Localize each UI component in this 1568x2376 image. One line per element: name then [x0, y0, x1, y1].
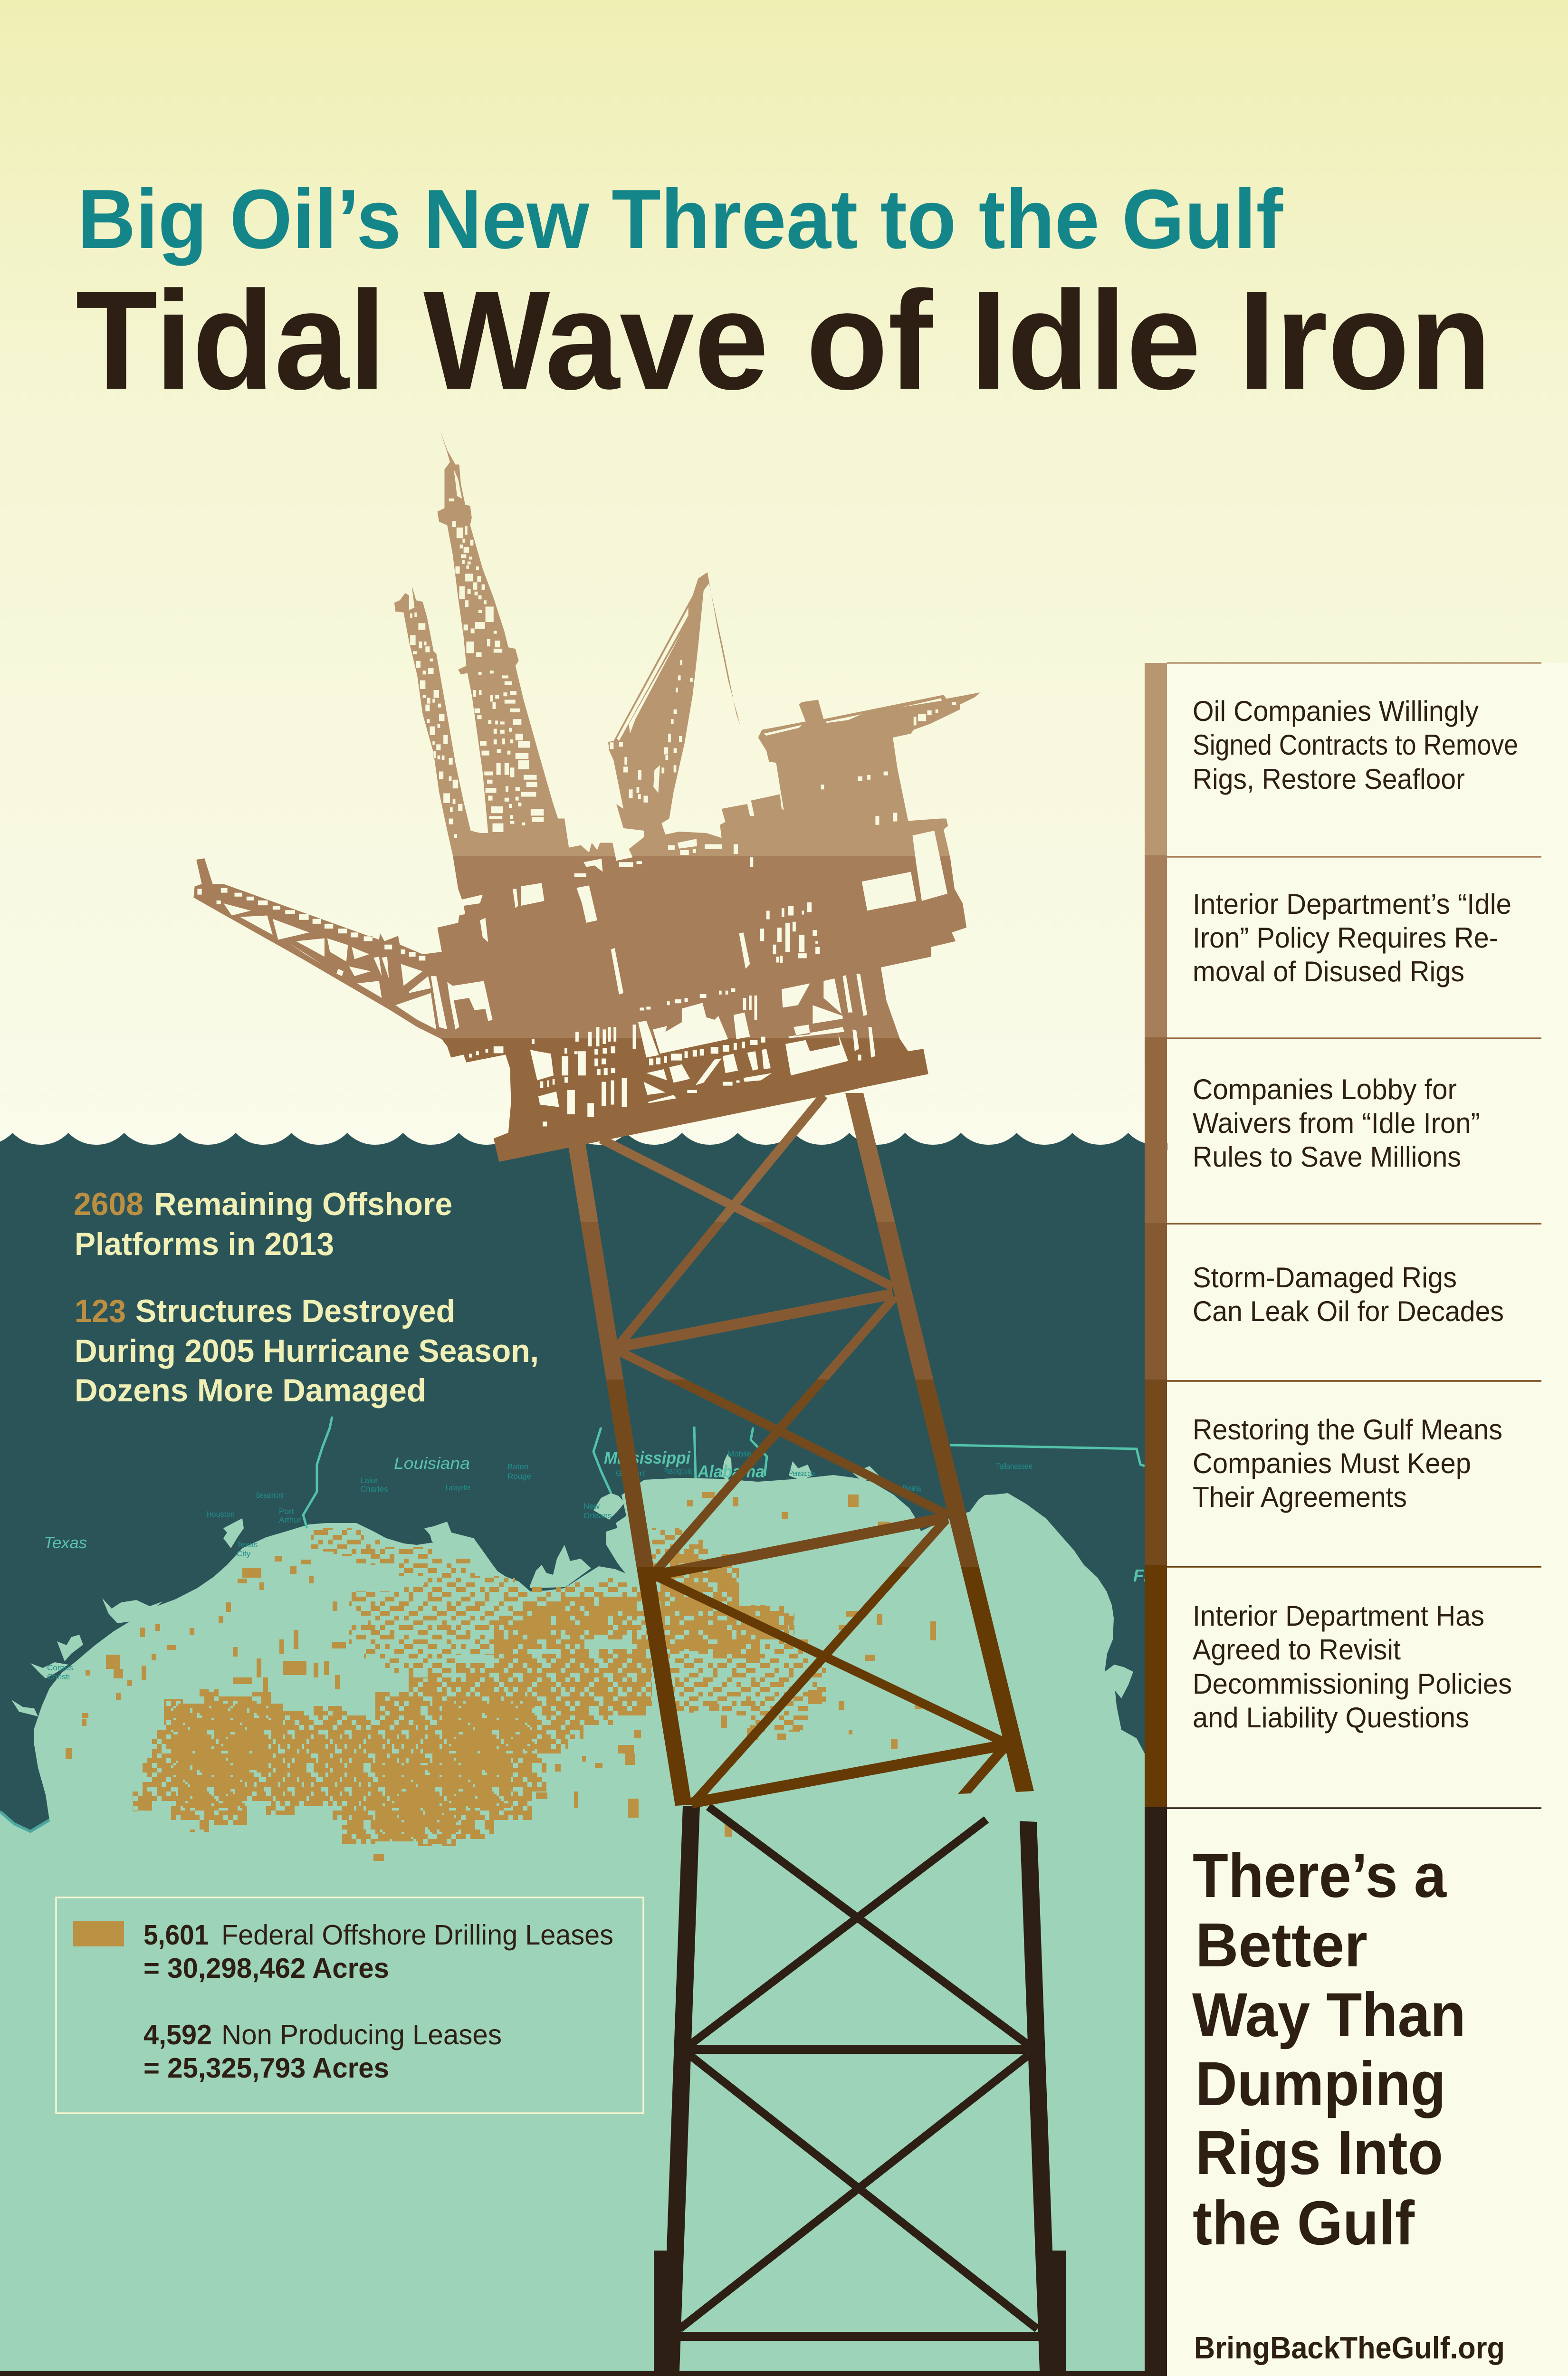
state names: Mississippi — [604, 1448, 691, 1467]
city names: Panama — [903, 1484, 921, 1493]
sidebar: step 5 text: Their Agreements — [1193, 1481, 1407, 1513]
website url: BringBackTheGulf.org — [1194, 2330, 1505, 2365]
stat: remaining platforms: 2608 — [74, 1186, 143, 1222]
city names: Texas — [237, 1540, 258, 1549]
sidebar: step 5 text: Restoring the Gulf Means — [1193, 1414, 1502, 1446]
sidebar: closing statement: Way Than — [1192, 1980, 1466, 2050]
title block — [76, 172, 1492, 419]
map labels — [44, 1448, 1149, 1681]
city names — [47, 1449, 1033, 1681]
stat: destroyed structures: Dozens More Damaged — [75, 1372, 426, 1408]
city names: Corpus — [47, 1663, 73, 1672]
leases: dense western and central field — [133, 1635, 652, 1846]
legend text — [143, 1919, 613, 2084]
sidebar: step 6 text — [1193, 1600, 1512, 1734]
sidebar: closing statement: There’s a — [1193, 1840, 1447, 1910]
map: Gulf of Mexico with coastline — [0, 1417, 1145, 2371]
legend text: = 25,325,793 Acres — [143, 2052, 389, 2084]
sidebar: step 1 text: Oil Companies Willingly — [1193, 695, 1479, 727]
upper jacket: broken brace — [958, 1743, 1010, 1794]
sidebar: cream panel background — [1167, 663, 1568, 2376]
lower jacket: legs and feet — [654, 1806, 1066, 2371]
state names: Louisiana — [394, 1455, 470, 1473]
sidebar: step 6 text: Interior Department Has — [1193, 1600, 1484, 1632]
city names: Arthur — [279, 1515, 301, 1524]
state names: Texas — [44, 1534, 87, 1552]
state names: Fl — [1133, 1566, 1149, 1585]
map: coastline edge — [0, 1811, 49, 1831]
city names: Port — [279, 1507, 294, 1516]
leases: solid western lobes — [171, 1704, 535, 1841]
sidebar: step 3 text — [1193, 1073, 1480, 1173]
city names: Beaumont — [256, 1491, 284, 1500]
sidebar: step 5 text: Companies Must Keep — [1193, 1447, 1471, 1479]
lower jacket: intact structure on the seabed — [654, 1806, 1066, 2371]
city names: Orleans — [583, 1511, 612, 1520]
city names: Christi — [47, 1672, 70, 1681]
legend text: Federal Offshore Drilling Leases — [221, 1919, 613, 1951]
sidebar: step 1 text: Rigs, Restore Seafloor — [1193, 763, 1465, 795]
sidebar: closing statement — [1192, 1840, 1466, 2258]
stat: remaining platforms — [74, 1186, 452, 1262]
city names: Houston — [206, 1510, 235, 1519]
upper jacket: braces — [601, 1095, 1005, 1805]
sidebar: step 5 text — [1193, 1414, 1502, 1513]
seabed strip — [0, 2371, 1145, 2376]
lower jacket: horizontal members — [679, 2045, 1041, 2341]
sidebar: step 3 text: Rules to Save Millions — [1193, 1141, 1461, 1173]
leases: dense eastern core — [653, 1544, 794, 1663]
city names: Mobile — [727, 1449, 751, 1458]
city names: Charles — [360, 1485, 388, 1494]
stat: destroyed structures: During 2005 Hurricane Season, — [75, 1333, 539, 1369]
map: bays, marshes and delta — [11, 1454, 1133, 1716]
sidebar: step 1 text — [1193, 695, 1518, 795]
stat: destroyed structures: Structures Destroyed — [135, 1293, 455, 1329]
sidebar: step 4 text: Storm-Damaged Rigs — [1193, 1262, 1457, 1293]
stat: destroyed structures: 123 — [75, 1293, 126, 1329]
state names: Alabama — [697, 1462, 765, 1481]
city names: Gulfport — [616, 1469, 645, 1478]
city names: Pensacola — [789, 1469, 815, 1478]
city names: Lafayette — [446, 1483, 470, 1492]
stat: remaining platforms: Platforms in 2013 — [75, 1226, 334, 1262]
sidebar: step 6 text: and Liability Questions — [1193, 1702, 1469, 1734]
map: rivers and state borders — [303, 1417, 1145, 1528]
city names: Tallahassee — [996, 1462, 1033, 1471]
sidebar: step 2 text — [1193, 888, 1511, 987]
sidebar: closing statement: Better — [1195, 1910, 1367, 1980]
leases: medium density coastal band — [311, 1528, 826, 1732]
legend text: Non Producing Leases — [221, 2019, 502, 2050]
legend text: = 30,298,462 Acres — [143, 1953, 389, 1984]
sidebar: step 1 text: Signed Contracts to Remove — [1193, 729, 1518, 761]
sidebar: step 6 text: Agreed to Revisit — [1193, 1634, 1401, 1666]
water with scalloped wave line — [0, 1133, 1184, 2328]
sidebar separators — [1167, 663, 1541, 1808]
sidebar: closing statement: Rigs Into — [1195, 2117, 1443, 2187]
upper jacket: legs — [566, 1093, 1034, 1806]
sidebar: step 6 text: Decommissioning Policies — [1193, 1668, 1512, 1700]
leases: scattered outlying blocks — [66, 1492, 936, 1861]
sidebar: step 2 text: moval of Disused Rigs — [1193, 956, 1464, 987]
stat: remaining platforms: Remaining Offshore — [154, 1186, 452, 1222]
lower jacket: braces — [679, 1807, 1037, 2329]
state names — [44, 1448, 1149, 1585]
legend text: 5,601 — [143, 1919, 209, 1951]
city names: Pascagoula — [663, 1466, 692, 1475]
sidebar: step 3 text: Waivers from “Idle Iron” — [1193, 1107, 1480, 1139]
statistics text on water — [74, 1186, 539, 1408]
legend swatch — [73, 1921, 124, 1946]
sidebar: step 4 text — [1193, 1262, 1504, 1327]
oil rig silhouette — [193, 431, 980, 1162]
city names: Rouge — [507, 1472, 531, 1481]
upper jacket: tilted, colour-stepped structure — [566, 1093, 1034, 1806]
city names: Lake — [360, 1476, 378, 1485]
city names: Baton — [507, 1462, 528, 1471]
sidebar: step 3 text: Companies Lobby for — [1193, 1073, 1457, 1105]
leases: federal offshore drilling blocks — [66, 1492, 936, 1861]
sidebar: closing statement: Dumping — [1195, 2049, 1446, 2118]
stat: destroyed structures — [75, 1293, 539, 1408]
sidebar: step 2 text: Iron” Policy Requires Re- — [1193, 922, 1498, 954]
sidebar: closing statement: the Gulf — [1193, 2188, 1415, 2258]
leases: dense delta shelf — [494, 1597, 637, 1658]
upper jacket: horizontal members — [615, 1294, 1005, 1803]
sidebar: step 2 text: Interior Department’s “Idle — [1193, 888, 1511, 920]
legend text: 4,592 — [143, 2019, 212, 2050]
leases: second dense layer in the core — [176, 1692, 525, 1830]
title: main headline: Tidal Wave of Idle Iron — [76, 262, 1492, 419]
legend box — [56, 1897, 643, 2113]
sidebar: colour-stepped bar — [1145, 663, 1167, 2376]
title: kicker: Big Oil’s New Threat to the Gulf — [77, 172, 1283, 266]
city names: New — [583, 1502, 600, 1511]
city names: City — [237, 1549, 251, 1558]
sidebar: step 4 text: Can Leak Oil for Decades — [1193, 1295, 1504, 1327]
